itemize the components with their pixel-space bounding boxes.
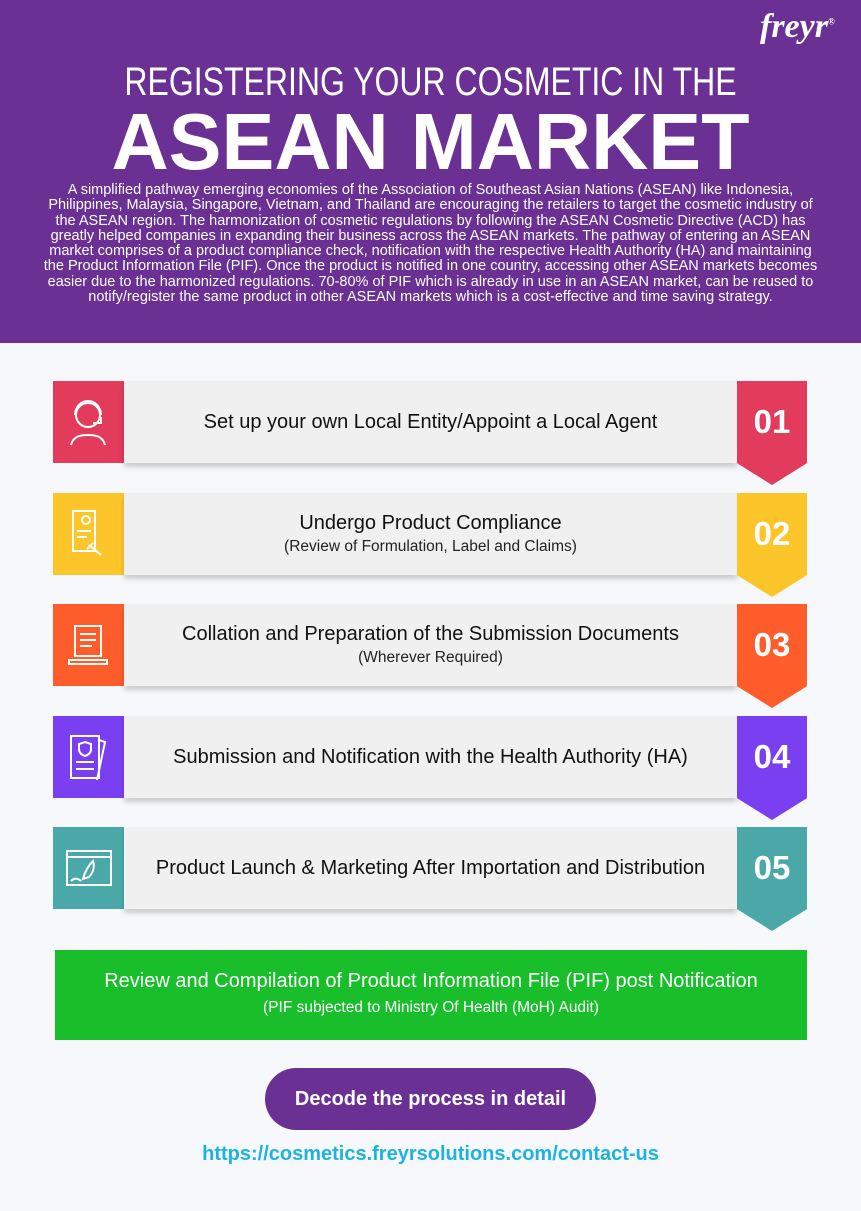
- icon: agent: [53, 381, 124, 463]
- icon: documents: [53, 604, 124, 686]
- button: [265, 1068, 596, 1130]
- step text: Submission and Notification with the Health Authority (HA): [173, 746, 688, 768]
- intro paragraph: A simplified pathway emerging economies of the Association of Southeast Asian Nations (ASEAN) like Indonesia,: [68, 182, 793, 198]
- step text: [124, 604, 737, 686]
- intro paragraph: the ASEAN region. The harmonization of cosmetic regulations by following the ASEAN Cosmetic Directive (ACD) has: [55, 213, 806, 229]
- number 02: [737, 493, 807, 597]
- step text: (Wherever Required): [358, 649, 503, 666]
- title line 2: ASEAN MARKET: [111, 97, 749, 186]
- url: https://cosmetics.freyrsolutions.com/contact-us: [202, 1143, 659, 1165]
- number 05: [737, 827, 807, 931]
- intro paragraph: greatly helped companies in expanding their business across the ASEAN markets. The pathway of entering an ASEAN: [51, 228, 810, 244]
- step text: [124, 493, 737, 575]
- step text: Set up your own Local Entity/Appoint a Local Agent: [204, 410, 657, 432]
- green PIF box: Review and Compilation of Product Information File (PIF) post Notification: [104, 970, 758, 992]
- number 02: 02: [754, 515, 790, 552]
- icon: launch: [53, 827, 124, 909]
- step 01: [53, 381, 807, 485]
- step 02: [53, 493, 807, 597]
- intro paragraph: Philippines, Malaysia, Singapore, Vietnam, and Thailand are encouraging the retailers to target the cosmetic industry of: [48, 197, 813, 213]
- step text: (Review of Formulation, Label and Claims): [284, 538, 577, 555]
- step text: Undergo Product Compliance: [299, 512, 562, 534]
- intro paragraph: the Product Information File (PIF). Once the product is notified in one country, accessing other ASEAN markets becomes: [44, 258, 817, 274]
- intro paragraph: [44, 182, 817, 305]
- header panel: [0, 0, 861, 343]
- step text: [124, 381, 737, 463]
- icon: compliance: [53, 493, 124, 575]
- intro paragraph: market comprises of a product compliance check, notification with the respective Health Authority (HA) and maintaining: [49, 243, 812, 259]
- green PIF box: (PIF subjected to Ministry Of Health (MoH) Audit): [263, 999, 599, 1016]
- icon: submission: [53, 716, 124, 798]
- step text: Collation and Preparation of the Submission Documents: [182, 623, 679, 645]
- number 01: [737, 381, 807, 485]
- title line 1: REGISTERING YOUR COSMETIC IN THE: [124, 60, 737, 104]
- green PIF box: [55, 950, 807, 1040]
- number 03: 03: [754, 626, 790, 663]
- step text: [124, 716, 737, 798]
- step 04: [53, 716, 807, 820]
- step text: Product Launch & Marketing After Importation and Distribution: [156, 856, 705, 878]
- logo: freyr®: [760, 8, 835, 45]
- number 05: 05: [754, 849, 790, 886]
- intro paragraph: easier due to the harmonized regulations. 70-80% of PIF which is already in use in an ASEAN market, can be reused to: [48, 274, 813, 290]
- number 04: 04: [754, 738, 790, 775]
- button: Decode the process in detail: [295, 1088, 566, 1110]
- intro paragraph: notify/register the same product in other ASEAN markets which is a cost-effective and time saving strategy.: [88, 289, 773, 305]
- step text: [124, 827, 737, 909]
- step 03: [53, 604, 807, 708]
- number 03: [737, 604, 807, 708]
- number 04: [737, 716, 807, 820]
- number 01: 01: [754, 403, 790, 440]
- step 05: [53, 827, 807, 931]
